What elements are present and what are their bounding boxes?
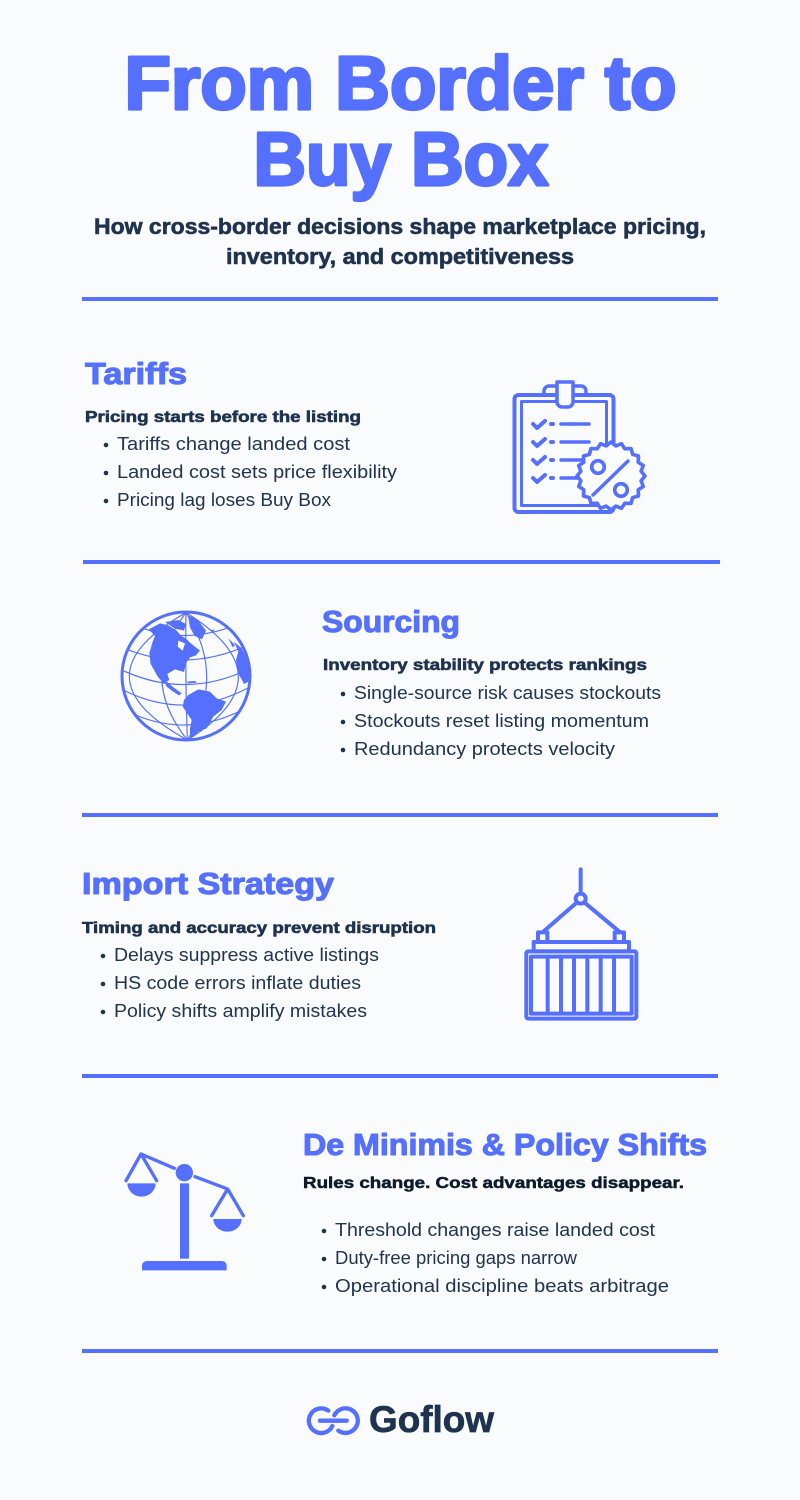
bullet list: import strategy: Policy shifts amplify mistakes — [114, 1001, 367, 1021]
bullet list: import strategy: Delays suppress active listings — [114, 945, 379, 965]
bullet list: de minimis and policy shifts — [322, 1220, 669, 1296]
subheading: de minimis and policy shifts: Rules change. Cost advantages disappear. — [303, 1175, 684, 1192]
panel: tariffs — [85, 356, 645, 512]
heading: import strategy: Import Strategy — [82, 866, 335, 901]
bullet list: de minimis and policy shifts: Duty-free pricing gaps narrow — [335, 1248, 578, 1268]
heading: tariffs: Tariffs — [85, 356, 187, 391]
bullet list: sourcing: Stockouts reset listing momentum — [354, 711, 649, 731]
subtitle: How cross-border decisions shape marketplace pricing, — [94, 214, 706, 239]
bullet list: import strategy — [101, 945, 379, 1021]
bullet list: sourcing — [341, 683, 661, 759]
bullet list: tariffs: Tariffs change landed cost — [117, 434, 350, 454]
icon: clipboard with percent badge — [514, 382, 645, 512]
title: Buy Box — [254, 117, 549, 201]
icon: balance scale — [126, 1154, 243, 1270]
subheading: sourcing: Inventory stability protects rankings — [323, 657, 647, 674]
panel: sourcing — [118, 604, 661, 759]
heading: sourcing: Sourcing — [322, 604, 460, 639]
heading: de minimis and policy shifts: De Minimis & Policy Shifts — [303, 1127, 707, 1162]
bullet list: tariffs: Landed cost sets price flexibility — [117, 462, 397, 482]
title: From Border to — [124, 41, 676, 125]
icon: shipping container on crane hook — [526, 869, 636, 1019]
bullet list: de minimis and policy shifts: Operational discipline beats arbitrage — [335, 1276, 669, 1296]
icon: Goflow linked loops — [309, 1408, 358, 1433]
panel: import strategy — [82, 866, 636, 1021]
subheading: import strategy: Timing and accuracy prevent disruption — [82, 920, 436, 937]
bullet list: import strategy: HS code errors inflate duties — [114, 973, 361, 993]
bullet list: sourcing: Single-source risk causes stockouts — [354, 683, 661, 703]
icon: globe — [118, 612, 253, 740]
title — [124, 41, 676, 201]
logo: Goflow — [309, 1399, 494, 1440]
bullet list: tariffs — [104, 434, 397, 510]
wordmark: Goflow — [369, 1399, 494, 1440]
bullet list: sourcing: Redundancy protects velocity — [354, 739, 615, 759]
panel: de minimis and policy shifts — [126, 1127, 707, 1296]
bullet list: de minimis and policy shifts: Threshold changes raise landed cost — [335, 1220, 655, 1240]
bullet list: tariffs: Pricing lag loses Buy Box — [117, 490, 331, 510]
subheading: tariffs: Pricing starts before the listing — [85, 409, 361, 426]
subtitle: inventory, and competitiveness — [226, 244, 574, 269]
subtitle — [94, 214, 706, 269]
